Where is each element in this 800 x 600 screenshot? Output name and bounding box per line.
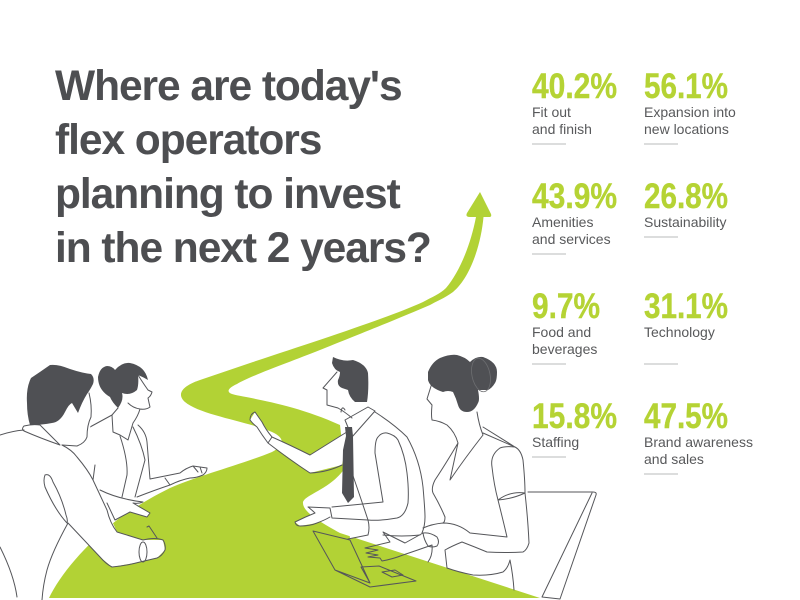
green winding path arrow [49,192,540,598]
stat: 9.7% food: beverages [532,341,597,357]
stat: 56.1% expansion: new locations [644,121,729,137]
stat: 31.1% technology: 31.1% [644,287,728,326]
title: in the next 2 years? [55,225,431,272]
hand of right woman [365,532,438,562]
stat: 43.9% amenities: 43.9% [532,177,617,216]
stat: 43.9% amenities: Amenities [532,214,593,230]
stat: 43.9% amenities: and services [532,231,611,247]
stat: 26.8% sustainability: Sustainability [644,214,726,230]
title [55,63,431,272]
stat: 9.7% food [532,287,600,365]
stat: 26.8% sustainability: 26.8% [644,177,728,216]
stat: 15.8% staffing: Staffing [532,434,579,450]
stat: 15.8% staffing: 15.8% [532,397,617,436]
stat: 40.2% fit out [532,67,617,145]
stat: 47.5% brand awareness: and sales [644,451,704,467]
illustration: laptop [313,531,416,587]
illustration: woman seated back left [90,363,207,520]
stat: 47.5% brand awareness: Brand awareness [644,434,753,450]
tie [342,427,354,503]
illustration: chair [528,492,596,599]
stat: 47.5% brand awareness: 47.5% [644,397,728,436]
title: planning to invest [55,171,401,218]
stat: 56.1% expansion: 56.1% [644,67,728,106]
stat: 31.1% technology [644,287,728,365]
illustration: woman seated right [365,355,529,590]
stat: 56.1% expansion: Expansion into [644,104,736,120]
stat: 40.2% fit out: 40.2% [532,67,617,106]
stat: 40.2% fit out: and finish [532,121,592,137]
stat: 56.1% expansion [644,67,736,145]
stat: 26.8% sustainability [644,177,728,238]
stat: 31.1% technology: Technology [644,324,715,340]
stat: 40.2% fit out: Fit out [532,104,571,120]
illustration: man seated front left [0,365,165,600]
illustration: man with tie pointing [250,357,425,539]
title: flex operators [55,117,321,164]
stat: 15.8% staffing [532,397,617,458]
stat: 9.7% food: Food and [532,324,591,340]
stat: 9.7% food: 9.7% [532,287,600,326]
stat: 43.9% amenities [532,177,617,255]
stat: 47.5% brand awareness [644,397,753,475]
title: Where are today's [55,63,402,110]
